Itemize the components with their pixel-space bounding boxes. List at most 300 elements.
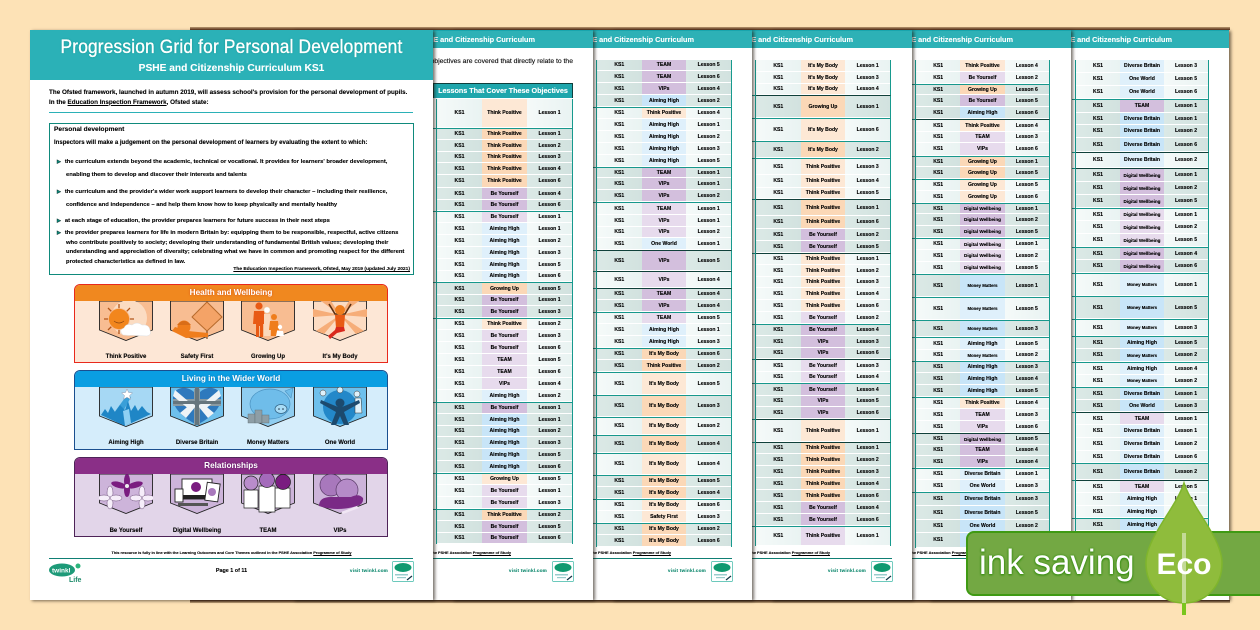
page 5 lesson table: Lesson 5 bbox=[1016, 228, 1038, 234]
page 5 lesson table: Lesson 1 bbox=[1016, 241, 1038, 247]
page 3 lesson table: TEAM bbox=[657, 206, 671, 212]
page 5 lesson table: KS1 bbox=[933, 110, 943, 116]
page 6 lesson table: KS1 bbox=[1093, 250, 1103, 256]
box lead-in: Inspectors will make a judgement on the personal development of learners by evaluating the extent to which: bbox=[54, 140, 368, 146]
page 4 lesson table: KS1 bbox=[773, 410, 783, 416]
page 4 lesson table: Lesson 4 bbox=[857, 504, 879, 510]
panel: Living in the Wider World bbox=[74, 370, 388, 450]
page 4 lesson table: Think Positive bbox=[806, 279, 840, 285]
page 6 lesson table: Lesson 5 bbox=[1175, 198, 1197, 204]
page 3 lesson table: KS1 bbox=[614, 98, 624, 104]
page 4 lesson table: It's My Body bbox=[808, 86, 838, 92]
page 5 lesson table: KS1 bbox=[933, 86, 943, 92]
page 4 lesson table: KS1 bbox=[773, 386, 783, 392]
page 4 lesson table: Lesson 1 bbox=[857, 104, 879, 110]
panel: Relationships bbox=[74, 457, 388, 537]
page 4 lesson table: KS1 bbox=[773, 327, 783, 333]
page 5 lesson table: Aiming High bbox=[967, 364, 997, 370]
page 5 lesson table: Lesson 3 bbox=[1016, 326, 1038, 332]
label: Safety First bbox=[181, 354, 213, 360]
page 6 lesson table: KS1 bbox=[1093, 508, 1103, 514]
page 4 lesson table: Think Positive bbox=[806, 219, 840, 225]
page 6 lesson table: Aiming High bbox=[1127, 522, 1157, 528]
page 3 PSHE logo bbox=[711, 561, 733, 582]
page 2 lesson table: Think Positive bbox=[487, 131, 522, 137]
page 5 lesson table: Lesson 5 bbox=[1016, 98, 1038, 104]
page 3 lesson table: Lesson 6 bbox=[698, 538, 720, 544]
page 2 lesson table: Lesson 5 bbox=[538, 262, 561, 268]
page 4 lesson table: Lesson 6 bbox=[857, 350, 879, 356]
page 3 lesson table: KS1 bbox=[614, 338, 624, 344]
page 5 lesson table: Lesson 4 bbox=[1016, 62, 1038, 68]
bullet 1 bbox=[56, 159, 388, 178]
page 2 lesson table: KS1 bbox=[455, 392, 464, 398]
page 5 lesson table: Money Matters bbox=[967, 326, 998, 331]
page 5 lesson table: Be Yourself bbox=[969, 98, 996, 104]
page 6 lesson table: Digital Wellbeing bbox=[1124, 224, 1160, 230]
banner text: ink saving bbox=[979, 543, 1135, 582]
page 3 lesson table: KS1 bbox=[614, 302, 624, 308]
page 6 lesson table: Lesson 1 bbox=[1175, 212, 1197, 218]
twinkl life logo: Life bbox=[69, 577, 82, 584]
page 4 lesson table: KS1 bbox=[773, 104, 783, 110]
page 6 lesson table: Lesson 2 bbox=[1175, 185, 1197, 191]
page 3 lesson table: Lesson 2 bbox=[698, 229, 720, 235]
page 2 lesson table: KS1 bbox=[455, 166, 464, 172]
page 3 lesson table: KS1 bbox=[614, 110, 624, 116]
label: Money Matters bbox=[247, 440, 289, 446]
page 5 lesson table: KS1 bbox=[933, 510, 943, 516]
page 4 lesson table: KS1 bbox=[773, 146, 783, 152]
page 4 lesson table: It's My Body bbox=[808, 74, 838, 80]
page 3 lesson table bbox=[593, 60, 732, 547]
page 5 lesson table: Growing Up bbox=[968, 182, 997, 188]
page 6 lesson table: Lesson 5 bbox=[1175, 484, 1197, 490]
page 6 lesson table: Diverse Britain bbox=[1124, 390, 1160, 396]
page 5 lesson table: Think Positive bbox=[965, 400, 1000, 406]
page 6 lesson table: Money Matters bbox=[1127, 325, 1157, 330]
page 6 lesson table: Aiming High bbox=[1127, 366, 1157, 372]
page 4 lesson table: KS1 bbox=[773, 480, 783, 486]
page 4 lesson table: Lesson 4 bbox=[857, 290, 879, 296]
page 2 lesson table: Lesson 6 bbox=[538, 202, 561, 208]
page 2 lesson table: Aiming High bbox=[490, 440, 520, 446]
page 3 lesson table: Aiming High bbox=[649, 146, 679, 152]
page 6 lesson table: Digital Wellbeing bbox=[1124, 212, 1160, 217]
page 5 lesson table: KS1 bbox=[933, 98, 943, 104]
page 6 lesson table: Lesson 1 bbox=[1175, 390, 1197, 396]
page 5 lesson table: KS1 bbox=[933, 206, 943, 212]
page 2 lesson table: Be Yourself bbox=[491, 344, 518, 350]
page 5 lesson table: Lesson 2 bbox=[1016, 74, 1038, 80]
icon: One World bbox=[313, 387, 367, 427]
page 3 lesson table: KS1 bbox=[614, 146, 624, 152]
page 4 lesson table: Lesson 1 bbox=[857, 256, 879, 262]
page 2 lesson table: Lesson 1 bbox=[538, 405, 561, 411]
page 6 lesson table: Lesson 3 bbox=[1175, 508, 1197, 514]
page 4 lesson table: Think Positive bbox=[806, 428, 840, 434]
page 3 lesson table: TEAM bbox=[657, 74, 671, 80]
page 6 lesson table: KS1 bbox=[1093, 454, 1103, 460]
icon: Money Matters bbox=[241, 387, 295, 427]
page 3 lesson table: Lesson 3 bbox=[698, 146, 720, 152]
page 5 lesson table: KS1 bbox=[933, 182, 943, 188]
intro paragraph bbox=[49, 89, 407, 106]
page 5 lesson table: One World bbox=[970, 482, 995, 488]
page 4 lesson table: KS1 bbox=[773, 190, 783, 196]
page 6 lesson table: KS1 bbox=[1093, 263, 1103, 269]
page 6 lesson table: KS1 bbox=[1093, 378, 1103, 384]
page 6 lesson table: Lesson 5 bbox=[1175, 522, 1197, 528]
bullet 4 bbox=[56, 230, 404, 265]
page 6 lesson table: KS1 bbox=[1093, 484, 1103, 490]
page 3 lesson table: KS1 bbox=[614, 478, 624, 484]
page 2 lesson table: Lesson 1 bbox=[538, 488, 561, 494]
page 3 lesson table: KS1 bbox=[614, 403, 624, 409]
page 6 lesson table: Diverse Britain bbox=[1124, 441, 1160, 447]
page 6 lesson table: Lesson 5 bbox=[1175, 76, 1197, 82]
page 5 lesson table: Lesson 4 bbox=[1016, 458, 1038, 464]
page 6 lesson table: Lesson 1 bbox=[1175, 428, 1197, 434]
label: VIPs bbox=[333, 528, 346, 534]
page 3 lesson table: KS1 bbox=[614, 461, 624, 467]
page 3 lesson table: Lesson 5 bbox=[698, 478, 720, 484]
page 3 lesson table: VIPs bbox=[658, 218, 670, 224]
page 4 lesson table: Lesson 6 bbox=[857, 516, 879, 522]
page 4 lesson table: VIPs bbox=[817, 410, 829, 416]
page 5 lesson table: Lesson 2 bbox=[1016, 523, 1038, 529]
page 5 lesson table: KS1 bbox=[933, 158, 943, 164]
bullet 4: ▶ the provider prepares learners for life in modern Britain by: equipping them to be responsible, respectful, active citizens bbox=[57, 230, 398, 236]
page 2 lesson table: KS1 bbox=[455, 286, 464, 292]
page 5 lesson table: KS1 bbox=[933, 241, 943, 247]
page 5 lesson table: KS1 bbox=[933, 194, 943, 200]
page 4 lesson table: KS1 bbox=[773, 232, 783, 238]
page 2: objectives table bbox=[293, 30, 593, 600]
page 6 lesson table: Lesson 1 bbox=[1175, 116, 1197, 122]
page 2 lesson table: Lesson 3 bbox=[538, 332, 561, 338]
page 2 lesson table: Lesson 3 bbox=[538, 250, 561, 256]
page 3 lesson table: VIPs bbox=[658, 302, 670, 308]
page 6 lesson table: One World bbox=[1129, 89, 1155, 95]
page 5 lesson table bbox=[912, 60, 1050, 548]
page 4 lesson table: Think Positive bbox=[806, 533, 840, 539]
page 3 lesson table: It's My Body bbox=[649, 441, 679, 447]
page 3 lesson table: Lesson 4 bbox=[698, 302, 720, 308]
page 4 lesson table: Lesson 3 bbox=[857, 279, 879, 285]
icon: eco leaf bbox=[1145, 480, 1223, 615]
website link: visit twinkl.com bbox=[350, 568, 388, 573]
page 3 lesson table: Lesson 6 bbox=[698, 74, 720, 80]
page 3 lesson table: KS1 bbox=[614, 315, 624, 321]
page 2 lesson table: Aiming High bbox=[490, 250, 520, 256]
page 5 lesson table: Lesson 3 bbox=[1016, 364, 1038, 370]
page 2 lesson table: VIPs bbox=[499, 380, 510, 386]
page 6 lesson table: Lesson 3 bbox=[1175, 324, 1197, 330]
page 6 lesson table: Lesson 2 bbox=[1175, 378, 1197, 384]
page 6 lesson table: Lesson 1 bbox=[1175, 172, 1197, 178]
page 2 lesson table: Lesson 2 bbox=[538, 142, 561, 148]
page 2 lesson table: KS1 bbox=[455, 524, 464, 530]
page 2 lesson table: KS1 bbox=[455, 380, 464, 386]
page 3 lesson table: Lesson 2 bbox=[698, 526, 720, 532]
page 6 lesson table: Digital Wellbeing bbox=[1124, 238, 1160, 242]
page 5 lesson table: Diverse Britain bbox=[964, 471, 1000, 477]
PSHE logo bbox=[392, 561, 414, 582]
icon: Safety First bbox=[170, 301, 224, 341]
page 5 lesson table: Lesson 4 bbox=[1016, 376, 1038, 382]
page 3 lesson table: KS1 bbox=[614, 240, 624, 246]
page 2 lesson table: Aiming High bbox=[490, 428, 520, 434]
page 2 lesson table: Think Positive bbox=[487, 142, 522, 148]
page 3 lesson table: KS1 bbox=[614, 326, 624, 332]
page 6 lesson table: Digital Wellbeing bbox=[1124, 251, 1160, 256]
page 6 lesson table: Lesson 4 bbox=[1175, 366, 1197, 372]
label: Digital Wellbeing bbox=[173, 528, 221, 534]
page 2 lesson table: KS1 bbox=[455, 250, 464, 256]
label: Be Yourself bbox=[110, 528, 142, 534]
page 5 lesson table: Growing Up bbox=[968, 86, 997, 92]
page 6 lesson table: Diverse Britain bbox=[1124, 116, 1160, 122]
page 5 lesson table: KS1 bbox=[933, 523, 943, 529]
panel: Health and Wellbeing bbox=[74, 284, 388, 363]
page 5 lesson table: Lesson 4 bbox=[1016, 447, 1038, 453]
page 5 lesson table: Growing Up bbox=[968, 194, 997, 200]
page 3 lesson table: Safety First bbox=[650, 514, 678, 520]
page 3 lesson table: Lesson 1 bbox=[698, 170, 720, 176]
page 4 lesson table bbox=[752, 60, 891, 546]
page 3 lesson table: Lesson 1 bbox=[698, 122, 720, 128]
page 2 lesson table: KS1 bbox=[455, 178, 464, 184]
page 4 lesson table: Lesson 1 bbox=[857, 204, 879, 210]
page 2 lesson table: Lesson 5 bbox=[538, 524, 561, 530]
page 2 lesson table: Be Yourself bbox=[491, 405, 518, 411]
page 4 lesson table: KS1 bbox=[773, 126, 783, 132]
page 4 lesson table: KS1 bbox=[773, 374, 783, 380]
page 5 footer rule bbox=[771, 558, 1051, 559]
page 4 source note: This resource is fully in line with the Learning Outcomes and Core Themes outlined in the PSHE Association Programme of Study bbox=[590, 550, 830, 555]
page 4 lesson table: Lesson 1 bbox=[857, 445, 879, 451]
page 3 lesson table: KS1 bbox=[614, 380, 624, 386]
page 6 lesson table: KS1 bbox=[1093, 237, 1103, 243]
page 2 lesson table: KS1 bbox=[455, 405, 464, 411]
page 3 lesson table: KS1 bbox=[614, 514, 624, 520]
page 3 lesson table: KS1 bbox=[614, 122, 624, 128]
page 6 lesson table: Lesson 4 bbox=[1175, 250, 1197, 256]
label: Diverse Britain bbox=[176, 440, 218, 446]
page 3 lesson table: It's My Body bbox=[649, 526, 679, 532]
page 5 lesson table: Diverse Britain bbox=[964, 496, 1000, 502]
page 5 lesson table: KS1 bbox=[933, 282, 943, 288]
page 4 lesson table: Think Positive bbox=[806, 190, 840, 196]
page 6 lesson table: Digital Wellbeing bbox=[1124, 172, 1160, 178]
page 2 lesson table: Be Yourself bbox=[491, 202, 518, 208]
page 6 lesson table: KS1 bbox=[1093, 157, 1103, 163]
page 6 lesson table: Lesson 2 bbox=[1175, 224, 1197, 230]
page 4 lesson table: Think Positive bbox=[806, 178, 840, 184]
page 4 lesson table: Lesson 2 bbox=[857, 146, 879, 152]
page 3 header bbox=[452, 30, 752, 48]
page 5 lesson table: Lesson 3 bbox=[1016, 134, 1038, 140]
subtitle: PSHE and Citizenship Curriculum KS1 bbox=[139, 63, 324, 74]
page 5 lesson table: Lesson 1 bbox=[1016, 206, 1038, 212]
page 6 lesson table: Lesson 3 bbox=[1175, 402, 1197, 408]
page 5 lesson table: One World bbox=[970, 523, 995, 529]
page 2 lesson table: Lesson 2 bbox=[538, 392, 561, 398]
page 2 lesson table: Lesson 6 bbox=[538, 464, 561, 470]
page 2 lesson table: KS1 bbox=[455, 273, 464, 279]
page 5 lesson table: Lesson 1 bbox=[1016, 471, 1038, 477]
page 5 lesson table: KS1 bbox=[933, 364, 943, 370]
icon: It's My Body bbox=[313, 301, 367, 341]
page 6 lesson table: Money Matters bbox=[1127, 378, 1157, 383]
page 6 lesson table: Money Matters bbox=[1127, 352, 1157, 358]
page 3 lesson table: Lesson 6 bbox=[698, 351, 720, 357]
page 2 lesson table: Aiming High bbox=[490, 464, 520, 470]
page 4 lesson table: Think Positive bbox=[806, 268, 840, 274]
page 6 lesson table: Lesson 1 bbox=[1175, 282, 1197, 288]
page 2 lesson table: KS1 bbox=[455, 488, 464, 494]
page 3 lesson table: KS1 bbox=[614, 291, 624, 297]
page 4 lesson table: KS1 bbox=[773, 504, 783, 510]
page 2 lesson table: KS1 bbox=[455, 110, 464, 116]
page 2 lesson table: KS1 bbox=[455, 297, 464, 303]
page 2 lesson table: KS1 bbox=[455, 262, 464, 268]
page 3 lesson table: KS1 bbox=[614, 351, 624, 357]
page 4 lesson table: Lesson 5 bbox=[857, 244, 879, 250]
page 4 lesson table: Think Positive bbox=[806, 492, 840, 498]
page 6 lesson table: KS1 bbox=[1093, 390, 1103, 396]
page 3 lesson table: Lesson 2 bbox=[698, 423, 720, 429]
page 2 lesson table: Growing Up bbox=[490, 476, 519, 482]
page 4 lesson table: KS1 bbox=[773, 362, 783, 368]
page 4 website link: visit twinkl.com bbox=[828, 568, 866, 573]
page 3 lesson table: Lesson 4 bbox=[698, 86, 720, 92]
page 5 lesson table: VIPs bbox=[977, 458, 988, 464]
page 2 lesson table: Lesson 1 bbox=[538, 131, 561, 137]
page 6 lesson table: KS1 bbox=[1093, 340, 1103, 346]
page 5 lesson table: KS1 bbox=[933, 458, 943, 464]
teal divider bbox=[49, 112, 413, 113]
page 6 lesson table: Diverse Britain bbox=[1124, 128, 1160, 134]
page 5 header: PSHE and Citizenship Curriculum bbox=[896, 35, 1013, 44]
page 3 lesson table: KS1 bbox=[614, 170, 624, 176]
page 2 lesson table: Lesson 2 bbox=[538, 238, 561, 244]
page 6 lesson table: Money Matters bbox=[1127, 305, 1157, 310]
page 5 lesson table: KS1 bbox=[933, 74, 943, 80]
page 2 lesson table: Lesson 2 bbox=[538, 321, 561, 327]
bullet 3: ▶ at each stage of education, the provider prepares learners for future success in their next steps bbox=[57, 218, 330, 224]
icon: eco leaf: Eco bbox=[1156, 548, 1212, 581]
personal development quote box bbox=[49, 123, 414, 275]
page 4 lesson table: Be Yourself bbox=[809, 516, 837, 522]
page 4 lesson table: KS1 bbox=[773, 219, 783, 225]
page 5 lesson table: Digital Wellbeing bbox=[964, 265, 1001, 270]
page 2 lesson table: Lesson 1 bbox=[538, 214, 561, 220]
page 6 lesson table: Lesson 2 bbox=[1175, 468, 1197, 474]
page 5 lesson table: Think Positive bbox=[965, 122, 1000, 128]
intro paragraph: The Ofsted framework, launched in autumn 2019, will assess school's provision for the personal development of pupils. bbox=[49, 89, 407, 96]
page 5 lesson table: Aiming High bbox=[967, 110, 997, 116]
page 6 lesson table: KS1 bbox=[1093, 76, 1103, 82]
bullet 4: who contribute positively to society; developing their understanding of fundamental British values; developing their bbox=[66, 240, 388, 246]
page 4 lesson table: Be Yourself bbox=[809, 314, 837, 320]
page 6 lesson table: Lesson 6 bbox=[1175, 142, 1197, 148]
page 5 lesson table: Lesson 1 bbox=[1016, 158, 1038, 164]
page 2 lesson table: KS1 bbox=[455, 416, 464, 422]
page 6: table continuation bbox=[929, 30, 1229, 600]
icon: Digital Wellbeing bbox=[170, 474, 224, 514]
page 6 lesson table: Lesson 6 bbox=[1175, 537, 1197, 543]
page 6 lesson table: Diverse Britain bbox=[1124, 454, 1160, 460]
page 5 lesson table: Lesson 1 bbox=[1016, 282, 1038, 288]
page 5 lesson table: Lesson 5 bbox=[1016, 510, 1038, 516]
page 2 lesson table: Lesson 6 bbox=[538, 344, 561, 350]
page 4 lesson table: Lesson 3 bbox=[857, 164, 879, 170]
page 4 lesson table: Think Positive bbox=[806, 256, 840, 262]
page 3 source note: This resource is fully in line with the Learning Outcomes and Core Themes outlined in the PSHE Association Programme of Study bbox=[431, 550, 671, 555]
page 6 lesson table: Lesson 5 bbox=[1175, 304, 1197, 310]
page 2 lesson table: Lesson 6 bbox=[538, 535, 561, 541]
page 3 lesson table: It's My Body bbox=[649, 490, 679, 496]
page 3 lesson table: KS1 bbox=[614, 258, 624, 264]
page 6 lesson table: Aiming High bbox=[1127, 537, 1157, 543]
page 4 lesson table: Lesson 1 bbox=[857, 428, 879, 434]
page 6 lesson table: KS1 bbox=[1093, 103, 1103, 109]
page 4 lesson table: KS1 bbox=[773, 164, 783, 170]
page 6 lesson table: KS1 bbox=[1093, 537, 1103, 543]
bullet 1: enabling them to develop and discover their interests and talents bbox=[66, 172, 247, 178]
page 2 lesson table: KS1 bbox=[455, 512, 464, 518]
page 2 lesson table: KS1 bbox=[455, 308, 464, 314]
page 6 lesson table: Diverse Britain bbox=[1124, 142, 1160, 148]
page 3 lesson table: KS1 bbox=[614, 206, 624, 212]
page 6 lesson table: Digital Wellbeing bbox=[1124, 186, 1160, 190]
bullet 4: understanding and appreciation of diversity; celebrating what we have in common and promoting respect for the different bbox=[66, 249, 404, 255]
title: Progression Grid for Personal Development bbox=[61, 37, 402, 58]
page 5 lesson table: Diverse Britain bbox=[964, 510, 1000, 516]
page 6 lesson table: TEAM bbox=[1135, 416, 1149, 422]
page 3 lesson table: Lesson 2 bbox=[698, 98, 720, 104]
page 3 lesson table: KS1 bbox=[614, 423, 624, 429]
page 2 lesson table: Think Positive bbox=[487, 512, 522, 518]
page 3 lesson table: It's My Body bbox=[649, 423, 679, 429]
page 3 lesson table: It's My Body bbox=[649, 461, 679, 467]
page 2 lesson table: Think Positive bbox=[487, 166, 522, 172]
page 3 lesson table: Lesson 3 bbox=[698, 514, 720, 520]
page 3 lesson table: Lesson 4 bbox=[698, 461, 720, 467]
page 4 lesson table: Think Positive bbox=[806, 290, 840, 296]
label: Aiming High bbox=[108, 440, 144, 446]
page 2 lesson table: KS1 bbox=[455, 214, 464, 220]
page 2 lesson table: Be Yourself bbox=[491, 500, 518, 506]
page 2 intro text: objectives are covered that directly relate to the bbox=[431, 58, 573, 65]
page 5 lesson table: Aiming High bbox=[967, 388, 997, 394]
page 3 lesson table: Aiming High bbox=[649, 338, 679, 344]
page 2 lesson table: Lesson 6 bbox=[538, 273, 561, 279]
page 2 lesson table: KS1 bbox=[455, 142, 464, 148]
page 4 lesson table: Lesson 3 bbox=[857, 74, 879, 80]
twinkl life logo bbox=[49, 564, 82, 584]
panel heading bbox=[75, 458, 387, 474]
page 5 lesson table: KS1 bbox=[933, 537, 943, 543]
page 5 lesson table: KS1 bbox=[933, 122, 943, 128]
page 5 lesson table: Think Positive bbox=[965, 62, 1000, 68]
page 6 lesson table: KS1 bbox=[1093, 128, 1103, 134]
page 4 lesson table: KS1 bbox=[773, 279, 783, 285]
page 3 lesson table: KS1 bbox=[614, 276, 624, 282]
page 4 lesson table: Be Yourself bbox=[809, 374, 837, 380]
